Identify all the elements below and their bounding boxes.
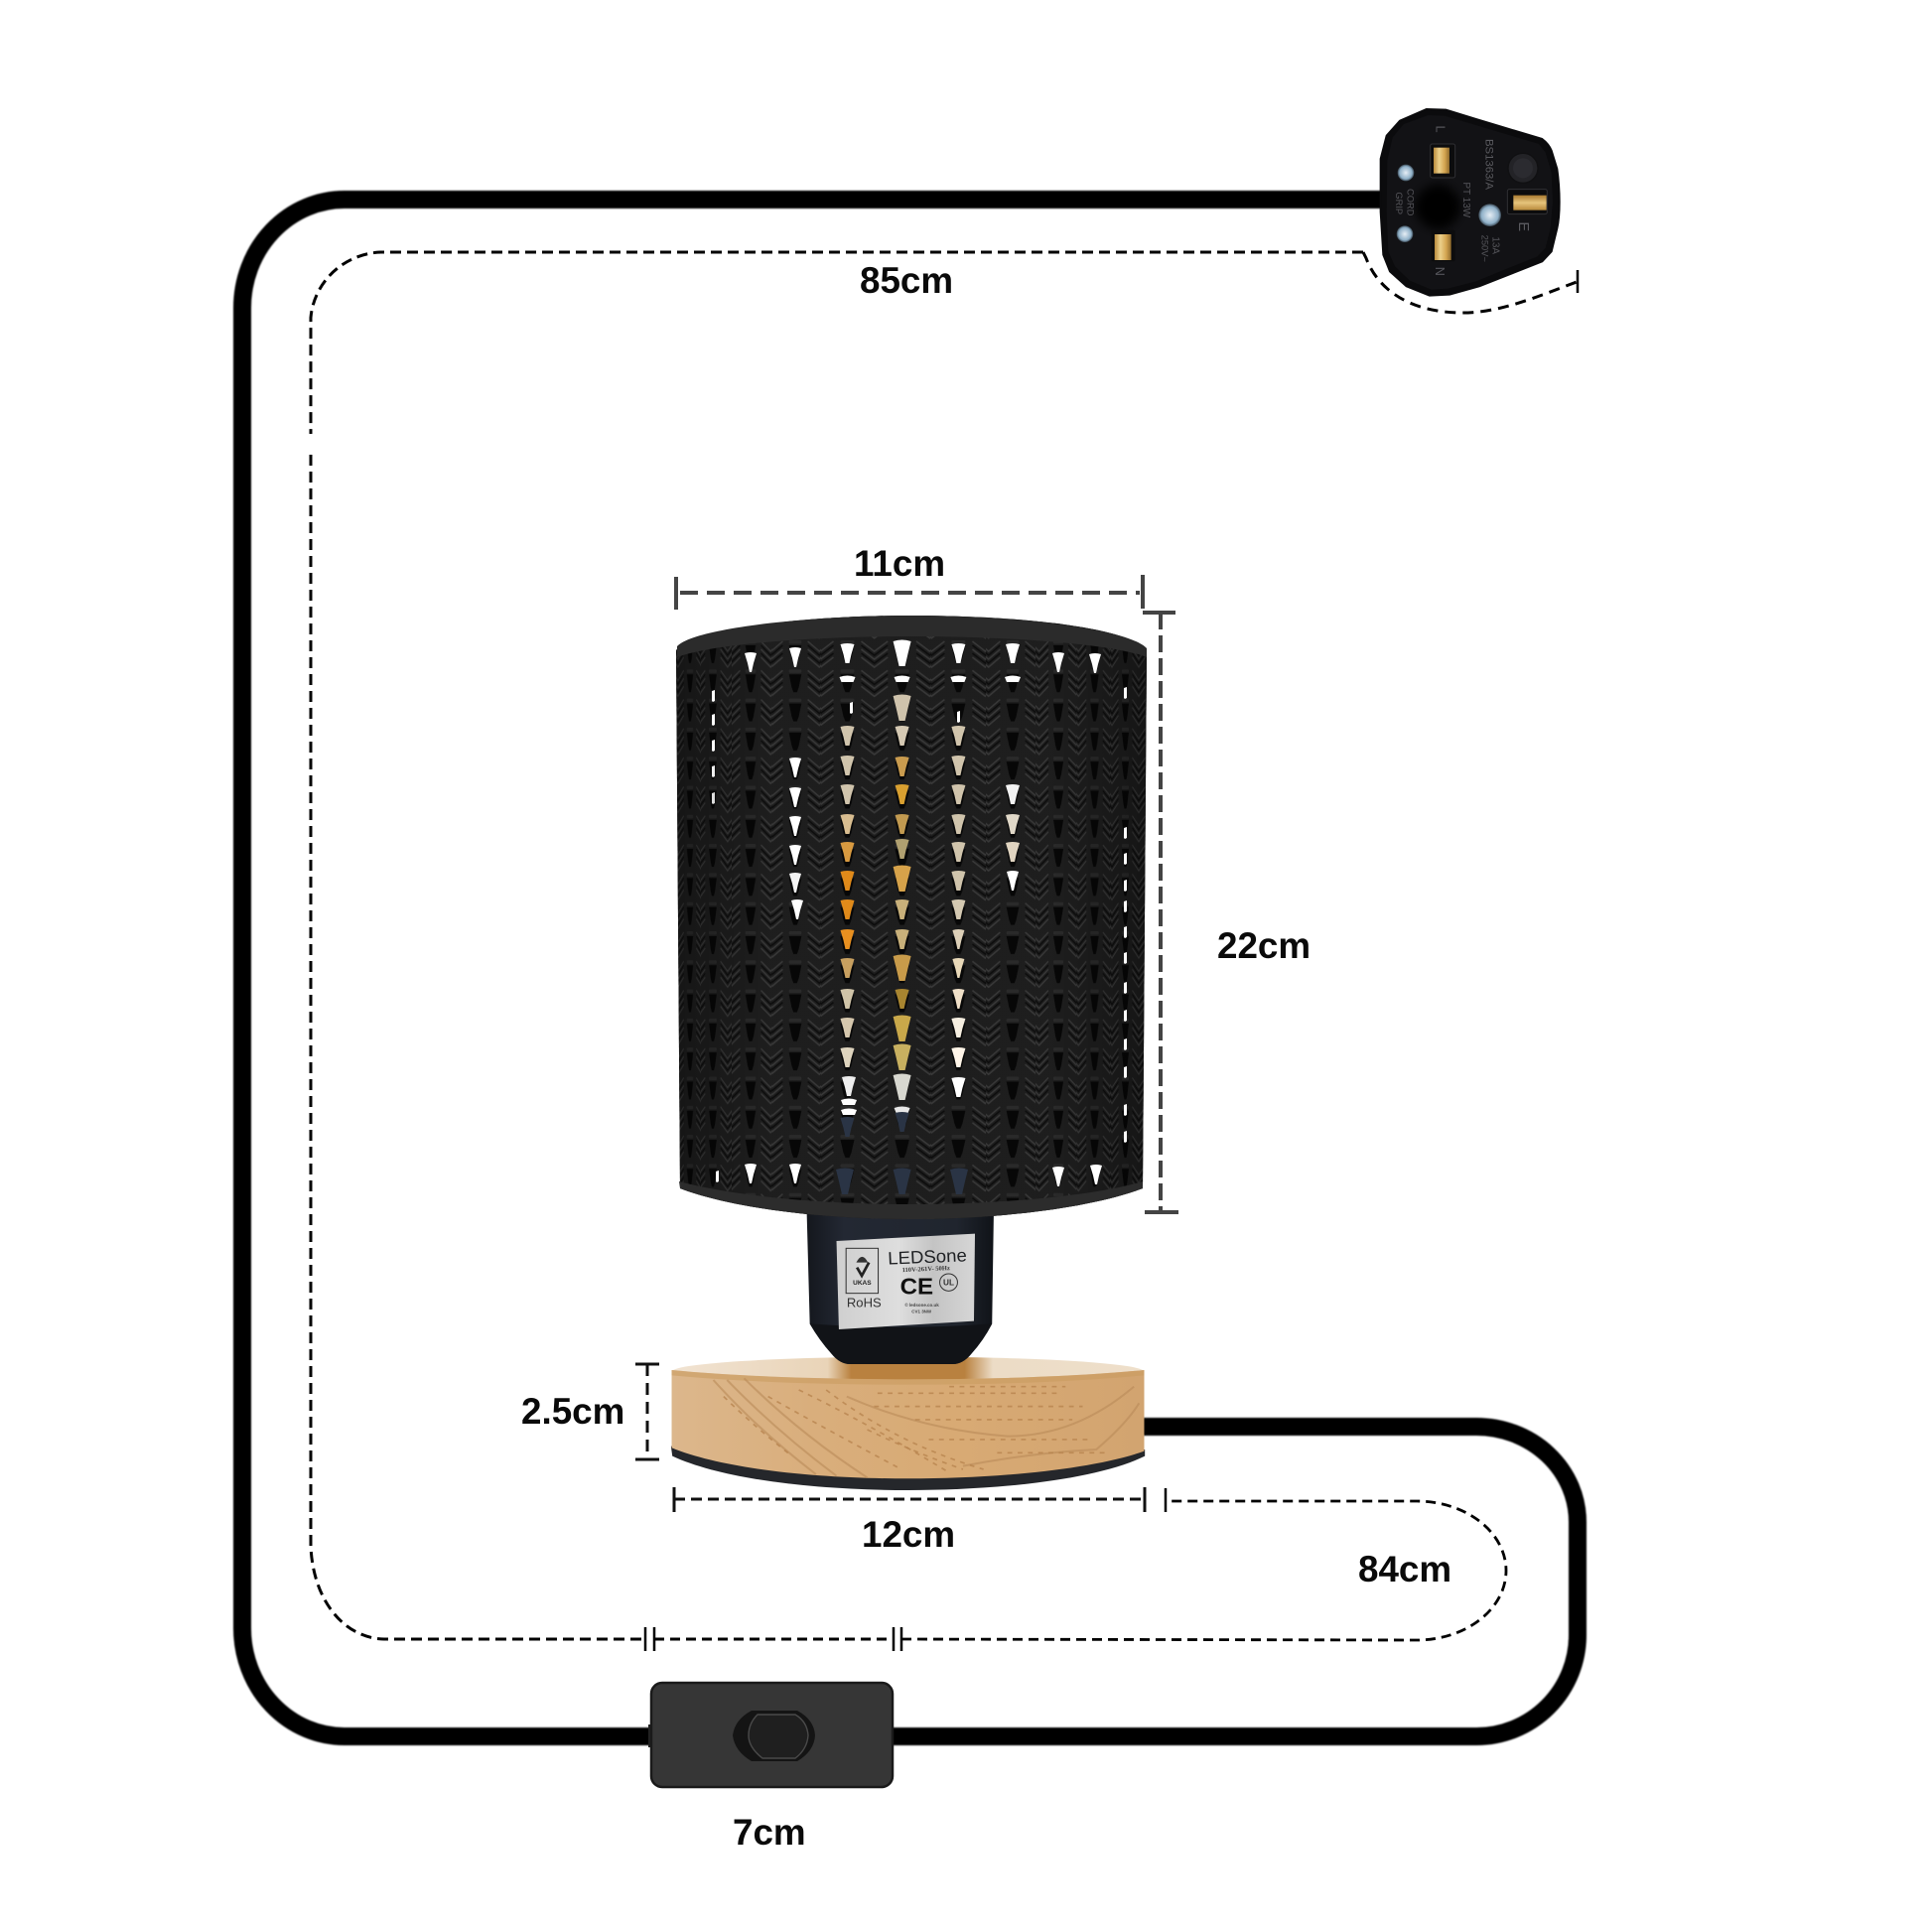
silver product label: CV1 3NW: [911, 1310, 932, 1314]
silver product label: 110V-261V- 50Hz: [902, 1265, 950, 1274]
icon: UK 3-pin plug: 13A: [1489, 236, 1500, 254]
wooden base: [671, 1357, 1145, 1490]
icon: UK 3-pin plug: GRIP: [1394, 192, 1404, 214]
icon: UK 3-pin plug: CORD: [1405, 189, 1415, 216]
icon: UK 3-pin plug: BS1363/A: [1483, 139, 1495, 190]
dimension: 85cm cable line: [311, 252, 1578, 1651]
silver product label: UKAS: [853, 1280, 872, 1287]
shade openings showing bulb glow: [712, 639, 1127, 1194]
lamp socket with label: [807, 1211, 994, 1364]
inline switch: [648, 1683, 893, 1787]
silver product label: [837, 1234, 975, 1329]
dimension: switch 7cm: [654, 1627, 894, 1651]
dimension: base width 12cm: [674, 1487, 1145, 1512]
icon: UK 3-pin plug: L: [1434, 125, 1448, 133]
label: 2.5cm: 2.5cm: [521, 1391, 624, 1432]
label: 22cm: 22cm: [1217, 925, 1311, 966]
shade top rim: [677, 616, 1147, 657]
power cable: [242, 200, 1578, 1736]
shade bottom rim: [679, 1181, 1143, 1219]
dimension: shade width 11cm: [676, 575, 1143, 610]
base wood side with grain: [672, 1370, 1144, 1478]
black knitted lamp shade: [675, 616, 1147, 1231]
base felt pad: [671, 1447, 1145, 1490]
label: 85cm: 85cm: [860, 260, 953, 301]
dimension: base height 2.5cm: [635, 1364, 659, 1459]
shade knit texture: [675, 616, 1147, 1231]
dimension: 84cm cable line: [901, 1488, 1506, 1651]
base top surface: [672, 1357, 1144, 1387]
dimension: shade height 22cm: [1143, 613, 1178, 1212]
label: 7cm: 7cm: [733, 1812, 806, 1853]
label: 84cm: 84cm: [1358, 1549, 1451, 1589]
icon: UK 3-pin plug: PT 13W: [1460, 182, 1471, 218]
label: 12cm: 12cm: [862, 1514, 955, 1555]
silver product label: UL: [943, 1279, 954, 1288]
silver product label: RoHS: [847, 1296, 882, 1310]
icon: UK 3-pin plug: E: [1515, 221, 1531, 231]
icon: UK 3-pin plug: N: [1433, 267, 1447, 276]
label: 11cm: 11cm: [854, 543, 945, 584]
silver product label: CE: [900, 1275, 933, 1300]
icon: UK 3-pin plug: [1381, 109, 1560, 296]
silver product label: © ledsone.co.uk: [904, 1303, 939, 1308]
silver product label: LEDSone: [888, 1245, 967, 1269]
icon: UK 3-pin plug: 250V~: [1480, 235, 1490, 262]
